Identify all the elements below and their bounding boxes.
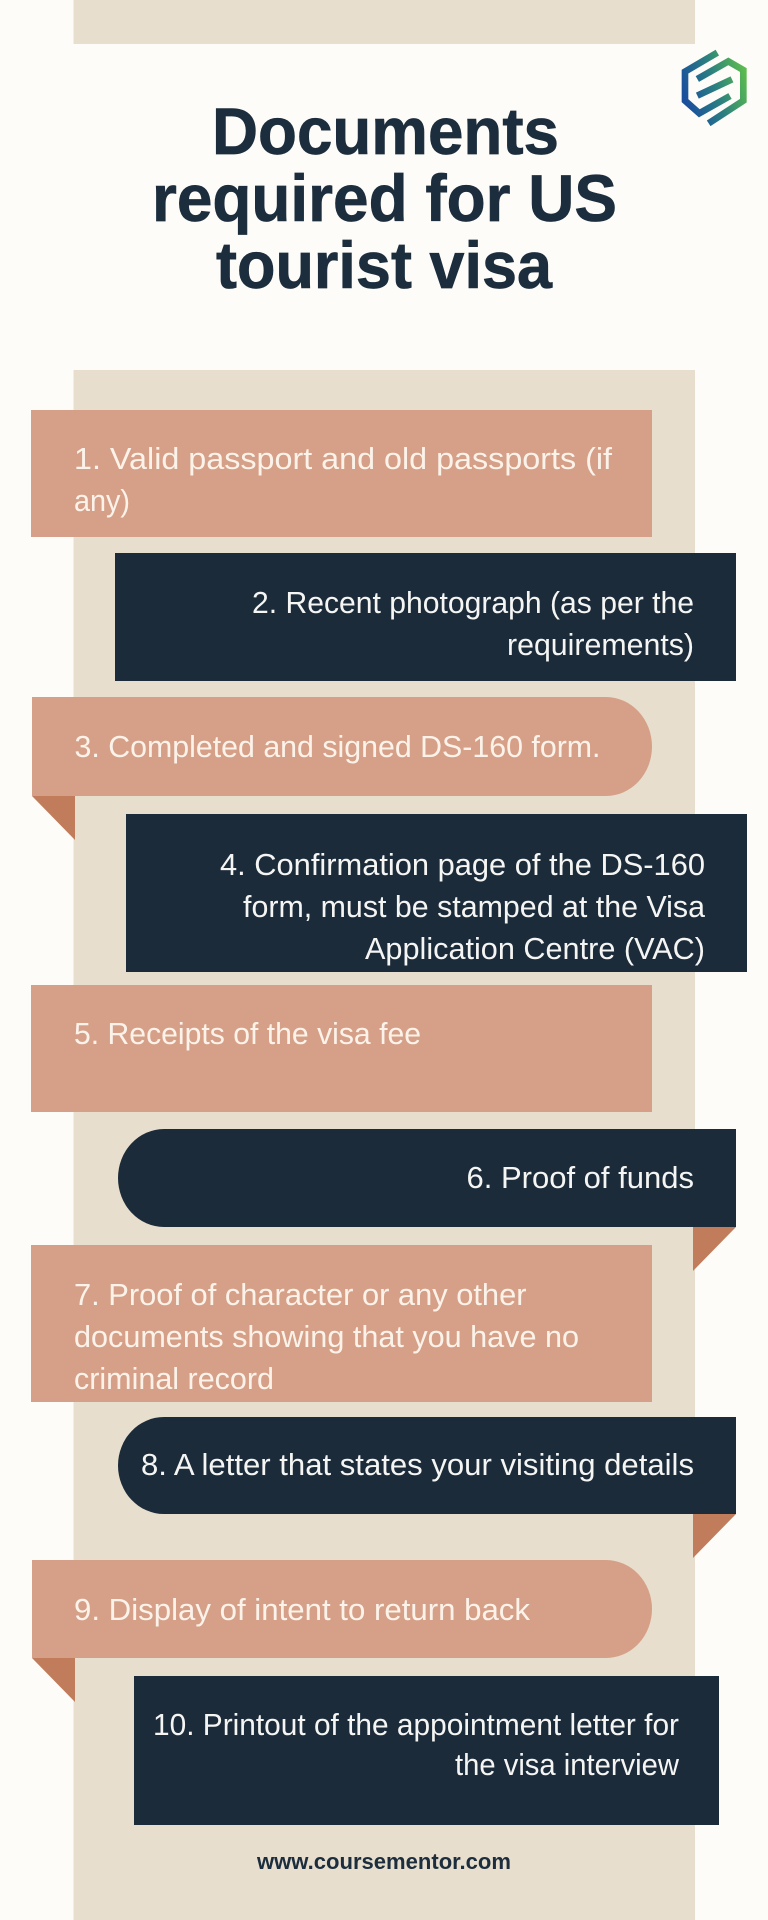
item 7: criminal record bbox=[74, 1362, 274, 1396]
panel: main background bbox=[74, 370, 695, 1920]
item 10: 10. Printout of the appointment letter for bbox=[153, 1708, 679, 1742]
item 2: 2. Recent photograph (as per the bbox=[252, 586, 694, 620]
title bbox=[152, 94, 617, 302]
icon: logo bbox=[685, 53, 743, 123]
item 5 bbox=[31, 985, 652, 1112]
item 2: requirements) bbox=[507, 628, 694, 662]
item 10 bbox=[134, 1676, 719, 1825]
item 3 bbox=[32, 697, 652, 840]
title: tourist visa bbox=[216, 228, 553, 302]
footer website: www.coursementor.com bbox=[256, 1849, 511, 1874]
item 4: form, must be stamped at the Visa bbox=[243, 890, 705, 924]
item 9: 9. Display of intent to return back bbox=[74, 1593, 531, 1627]
item 9 bbox=[32, 1560, 652, 1702]
item 8: 8. A letter that states your visiting details bbox=[141, 1448, 694, 1482]
item 6 bbox=[118, 1129, 736, 1271]
item 4 bbox=[126, 814, 747, 972]
item 7: 7. Proof of character or any other bbox=[74, 1278, 526, 1312]
item 10: the visa interview bbox=[455, 1748, 680, 1782]
item 1: any) bbox=[74, 484, 130, 518]
item 3: 3. Completed and signed DS-160 form. bbox=[74, 730, 600, 764]
item 7 bbox=[31, 1245, 652, 1402]
item 4: Application Centre (VAC) bbox=[365, 932, 705, 966]
item 4: 4. Confirmation page of the DS-160 bbox=[220, 848, 705, 882]
item 5: 5. Receipts of the visa fee bbox=[74, 1017, 421, 1051]
item 1 bbox=[31, 410, 652, 537]
title: Documents bbox=[212, 94, 559, 168]
item 6: 6. Proof of funds bbox=[466, 1161, 694, 1195]
item 7: documents showing that you have no bbox=[74, 1320, 579, 1354]
item 8 bbox=[118, 1417, 736, 1558]
title: required for US bbox=[152, 161, 617, 235]
item 1: 1. Valid passport and old passports (if bbox=[74, 442, 613, 476]
panel: top band bbox=[74, 0, 695, 44]
item 2 bbox=[115, 553, 736, 681]
